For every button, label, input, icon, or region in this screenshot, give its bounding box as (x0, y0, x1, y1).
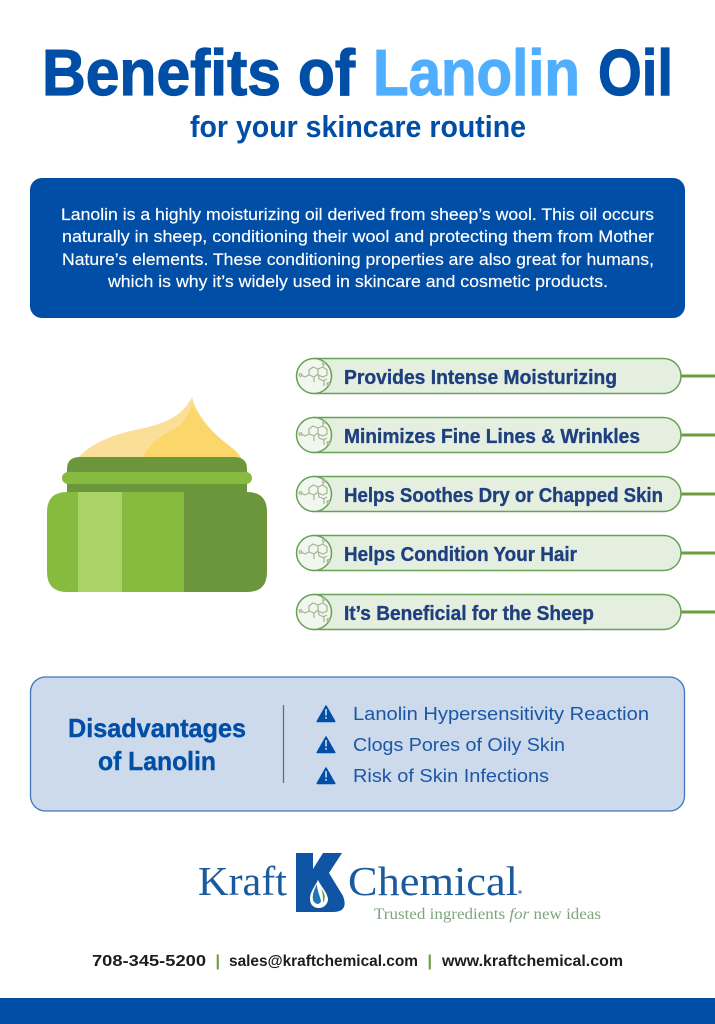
title: Lanolin (373, 36, 580, 109)
benefit: hair: Helps Condition Your Hair (344, 543, 577, 566)
panel: intro: naturally in sheep, conditioning their wool and protecting them from Mother (62, 228, 655, 246)
panel: intro: Nature’s elements. These conditioning properties are also great for humans, (62, 251, 654, 269)
logo: Kraft Chemical (198, 853, 601, 923)
footer bar (0, 998, 715, 1024)
risk: infections: Risk of Skin Infections (353, 765, 549, 786)
title: Benefits of (42, 36, 355, 109)
jar body (47, 492, 184, 592)
cream shaded side (143, 404, 241, 458)
panel: intro: Lanolin is a highly moisturizing oil derived from sheep’s wool. This oil occurs (61, 206, 654, 224)
jar highlight (78, 492, 122, 592)
jar ring (62, 472, 252, 484)
benefit: sheep: It’s Beneficial for the Sheep (344, 602, 594, 625)
contact line: sales@kraftchemical.com (229, 953, 418, 970)
contact line: | (428, 953, 432, 970)
risk: clogged pores: Clogs Pores of Oily Skin (353, 734, 565, 755)
contact line: 708-345-5200 (92, 953, 206, 970)
icon: cream jar (47, 397, 267, 592)
benefit: fine lines: Minimizes Fine Lines & Wrinkles (344, 425, 640, 448)
panel: disadvantages (30, 677, 684, 811)
benefit: sheep (296, 594, 715, 630)
subtitle: for your skincare routine (190, 109, 526, 144)
cream (78, 397, 241, 458)
benefit: hair (296, 536, 715, 570)
logo: Kraft Chemical: Trusted ingredients for new ideas (374, 906, 601, 923)
contact line (92, 953, 623, 970)
panel: intro: which is why it’s widely used in skincare and cosmetic products. (107, 273, 608, 291)
title (42, 36, 673, 109)
benefit: dry skin: Helps Soothes Dry or Chapped Skin (344, 484, 663, 507)
logo: Kraft Chemical: Kraft (198, 858, 288, 904)
jar shadow (184, 492, 267, 592)
heading (68, 713, 246, 776)
heading: Disadvantages (68, 713, 246, 743)
logo mark (296, 853, 345, 912)
jar neck (67, 457, 247, 492)
logo: Kraft Chemical: Chemical (348, 858, 518, 904)
heading: of Lanolin (98, 746, 216, 776)
panel: intro (30, 178, 685, 318)
title: Oil (598, 36, 673, 109)
contact line: www.kraftchemical.com (441, 953, 623, 970)
benefit: moisturizing (296, 358, 715, 394)
risk: hypersensitivity: Lanolin Hypersensitivity Reaction (353, 703, 649, 724)
benefit: moisturizing: Provides Intense Moisturizing (344, 366, 617, 389)
benefit: dry skin (296, 476, 715, 512)
contact line: | (216, 953, 220, 970)
benefit: fine lines (296, 418, 715, 452)
